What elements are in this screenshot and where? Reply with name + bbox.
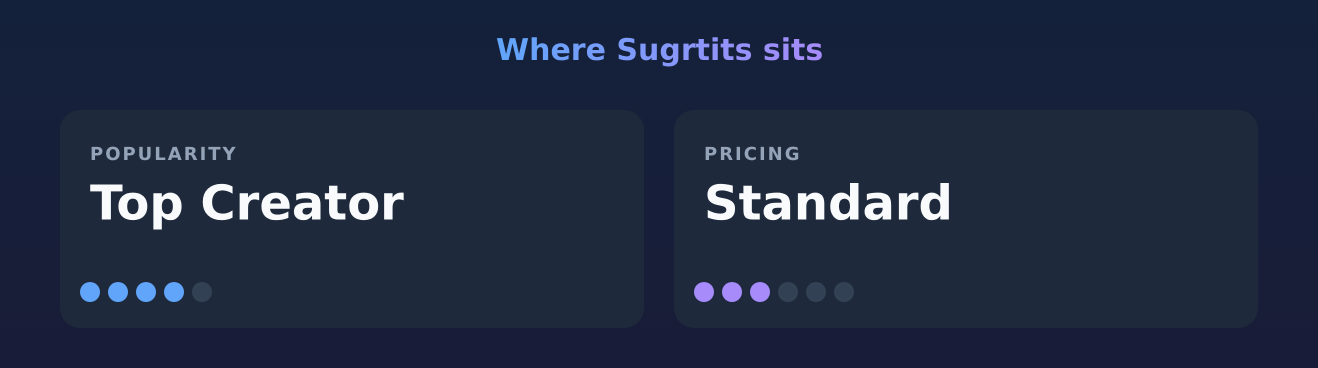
label: pricing: PRICING (704, 144, 802, 165)
value: standard: Standard (704, 176, 953, 232)
panel: pricing (674, 110, 1258, 328)
label: popularity: POPULARITY (90, 144, 238, 165)
rating dots: 4 of 5 (80, 282, 212, 302)
value: top creator: Top Creator (90, 176, 404, 232)
title: Where Sugrtits sits (496, 33, 823, 68)
panel: popularity (60, 110, 644, 328)
rating dots: 3 of 6 (694, 282, 854, 302)
